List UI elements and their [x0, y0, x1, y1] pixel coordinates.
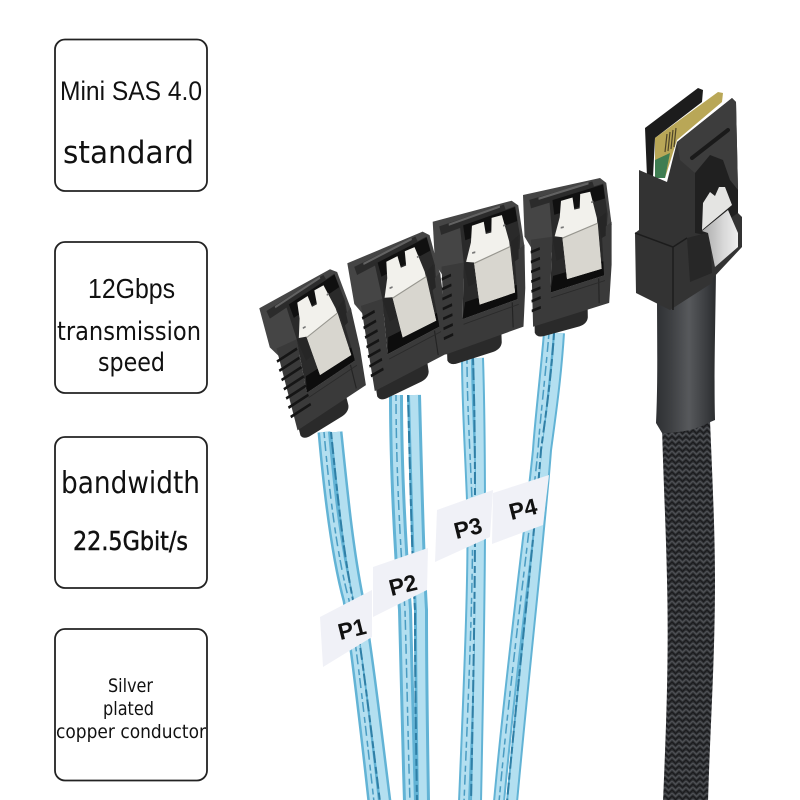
right Mini SAS connector	[635, 88, 742, 310]
panel: bandwidth 22.5Gbit/s: bandwidth	[61, 466, 200, 501]
cable label P2: P2	[386, 569, 420, 601]
panel: silver plated copper conductor: Silver	[108, 675, 153, 697]
cable label P3	[435, 490, 493, 562]
back plate	[645, 88, 703, 177]
cable label P3: P3	[451, 512, 485, 544]
cable label P4	[492, 475, 549, 544]
connector shell	[635, 98, 742, 310]
SATA connector P3	[433, 198, 528, 369]
SATA connector P1	[259, 264, 374, 445]
panel: silver plated copper conductor: plated	[103, 698, 154, 720]
cable label P2	[373, 548, 428, 617]
cable label P1: P1	[335, 613, 369, 645]
panel: Mini SAS 4.0 standard	[55, 40, 207, 191]
panel: Mini SAS 4.0 standard: standard	[63, 135, 194, 171]
heat shrink tube	[656, 272, 716, 433]
panel: Mini SAS 4.0 standard: Mini SAS 4.0	[60, 76, 202, 106]
panel: 12Gbps transmission speed: speed	[98, 348, 165, 378]
cable label P4: P4	[506, 493, 540, 525]
cable label P1	[320, 590, 372, 667]
panel: bandwidth 22.5Gbit/s	[55, 437, 207, 588]
panel: silver plated copper conductor: copper conductor	[56, 721, 206, 743]
braided sleeve	[662, 420, 715, 800]
panel: silver plated copper conductor	[55, 629, 207, 780]
metal latch	[702, 187, 732, 230]
SATA connector P2	[347, 227, 455, 406]
panel: 12Gbps transmission speed: transmission	[57, 317, 201, 347]
panel: bandwidth 22.5Gbit/s: 22.5Gbit/s	[73, 527, 188, 557]
blue SATA cables	[324, 333, 559, 800]
panel: 12Gbps transmission speed	[55, 242, 207, 393]
SATA connector P4	[523, 176, 613, 340]
panel: 12Gbps transmission speed: 12Gbps	[88, 273, 175, 304]
circuit board	[655, 92, 723, 178]
black braided cable	[656, 272, 716, 800]
